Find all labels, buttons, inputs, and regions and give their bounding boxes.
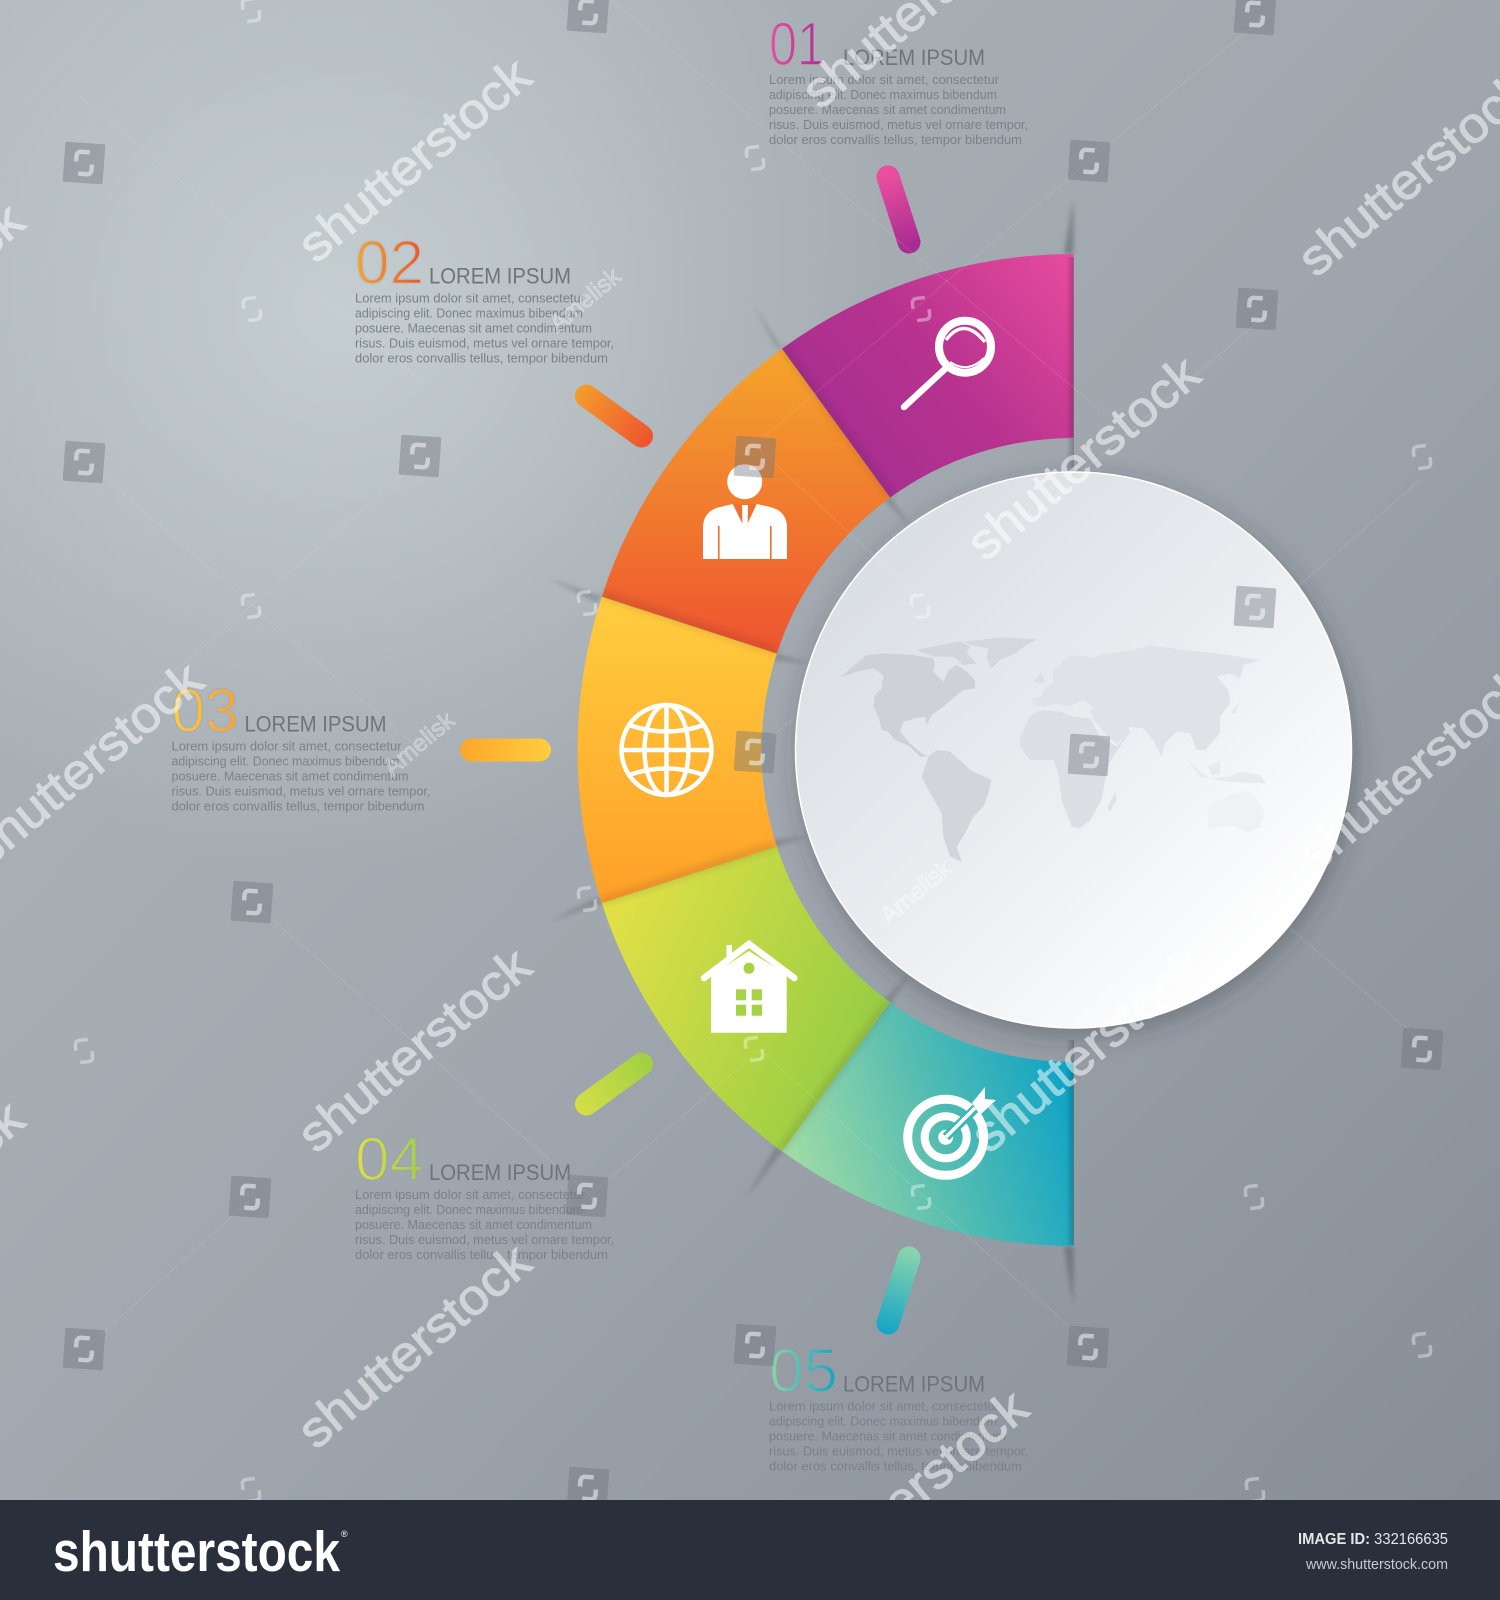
body 03: dolor eros convallis tellus, tempor bibendum: [172, 798, 424, 814]
watermark overlay: shutterstock: [960, 936, 1215, 1163]
segment 2 orange: [602, 349, 890, 654]
text block 01: [769, 10, 1028, 147]
tick: 03: [472, 738, 540, 762]
tick: 02: [586, 396, 642, 436]
icon: globe: [622, 705, 712, 795]
tick: 04: [586, 1064, 642, 1104]
watermark overlay: Amelisk: [378, 706, 461, 782]
body 04: [355, 1187, 614, 1262]
heading 05: LOREM IPSUM: [843, 1372, 985, 1396]
body 01: [769, 72, 1028, 147]
number 03: 03: [172, 676, 238, 744]
heading 02: LOREM IPSUM: [429, 264, 571, 288]
tick: 01: [888, 177, 909, 242]
body 02: posuere. Maecenas sit amet condimentum: [355, 320, 592, 336]
watermark overlay: Amelisk: [875, 854, 958, 930]
body 02: [355, 290, 614, 366]
registered mark: ®: [341, 1529, 348, 1539]
footer logo: shutterstock: [53, 1520, 340, 1584]
icon: person: [703, 464, 787, 559]
body 03: adipiscing elit. Donec maximus bibendum: [172, 754, 400, 768]
body 02: dolor eros convallis tellus, tempor bibendum: [355, 350, 608, 366]
number 01: 01: [769, 10, 825, 78]
body 04: adipiscing elit. Donec maximus bibendum: [355, 1202, 583, 1217]
icon: house: [704, 944, 794, 1033]
watermark overlay: shutterstock: [287, 936, 542, 1163]
image id: IMAGE ID: 332166635: [1298, 1531, 1448, 1548]
body 05: adipiscing elit. Donec maximus bibendum: [769, 1414, 997, 1428]
segment edge shadows: [602, 349, 890, 1151]
number 04: 04: [355, 1125, 424, 1193]
world map: [840, 637, 1267, 862]
body 01: risus. Duis euismod, metus vel ornare tempor,: [769, 117, 1028, 132]
number 02: 02: [355, 228, 424, 296]
heading 01: LOREM IPSUM: [843, 45, 985, 70]
watermark overlay: shutterstock: [287, 46, 542, 273]
body 05: dolor eros convallis tellus, tempor bibendum: [769, 1458, 1022, 1474]
watermark overlay: shutterstock: [784, 1378, 1039, 1600]
body 01: adipiscing elit. Donec maximus bibendum: [769, 87, 997, 102]
body 01: posuere. Maecenas sit amet condimentum: [769, 102, 1006, 117]
body 04: posuere. Maecenas sit amet condimentum: [355, 1217, 592, 1232]
segment 5 teal: [782, 1002, 1074, 1246]
body 03: risus. Duis euismod, metus vel ornare tempor,: [172, 784, 430, 798]
body 05: [769, 1398, 1028, 1474]
body 04: Lorem ipsum dolor sit amet, consectetur: [355, 1187, 586, 1202]
body 02: risus. Duis euismod, metus vel ornare tempor,: [355, 336, 614, 350]
watermark overlay: shutterstock: [287, 1232, 542, 1459]
panel: half ring segments: [578, 254, 1074, 1246]
text block 04: [355, 1125, 614, 1262]
heading 03: LOREM IPSUM: [244, 712, 386, 736]
text block 02: [355, 228, 614, 366]
body 02: adipiscing elit. Donec maximus bibendum: [355, 306, 583, 320]
body 01: dolor eros convallis tellus, tempor bibendum: [769, 132, 1022, 147]
footer bar: [0, 1500, 1500, 1600]
watermark overlay: shutterstock: [956, 344, 1211, 571]
body 04: dolor eros convallis tellus, tempor bibendum: [355, 1247, 608, 1262]
body 05: Lorem ipsum dolor sit amet, consectetur: [769, 1398, 1000, 1414]
body 03: [172, 738, 430, 814]
body 03: Lorem ipsum dolor sit amet, consectetur: [172, 738, 402, 754]
watermark overlay: Amelisk: [544, 262, 627, 338]
body 01: Lorem ipsum dolor sit amet, consectetur: [769, 72, 1000, 87]
panel: central disc: [796, 472, 1352, 1028]
segment 3 yellow: [578, 597, 777, 903]
body 03: posuere. Maecenas sit amet condimentum: [172, 768, 408, 784]
heading 04: LOREM IPSUM: [429, 1160, 571, 1185]
body 05: posuere. Maecenas sit amet condimentum: [769, 1428, 1006, 1444]
body 05: risus. Duis euismod, metus vel ornare tempor,: [769, 1444, 1028, 1458]
website: www.shutterstock.com: [1305, 1556, 1448, 1573]
segment 1 magenta: [782, 254, 1074, 498]
fold shadows: [548, 198, 1074, 1306]
icon: target: [908, 1087, 996, 1175]
number 05: 05: [769, 1336, 838, 1404]
icon: magnifying glass: [904, 321, 991, 407]
segment 4 green: [602, 846, 890, 1151]
body 04: risus. Duis euismod, metus vel ornare tempor,: [355, 1232, 614, 1247]
tick: 05: [888, 1258, 909, 1323]
body 02: Lorem ipsum dolor sit amet, consectetur: [355, 290, 586, 306]
text block 03: [172, 676, 430, 814]
text block 05: [769, 1336, 1028, 1474]
